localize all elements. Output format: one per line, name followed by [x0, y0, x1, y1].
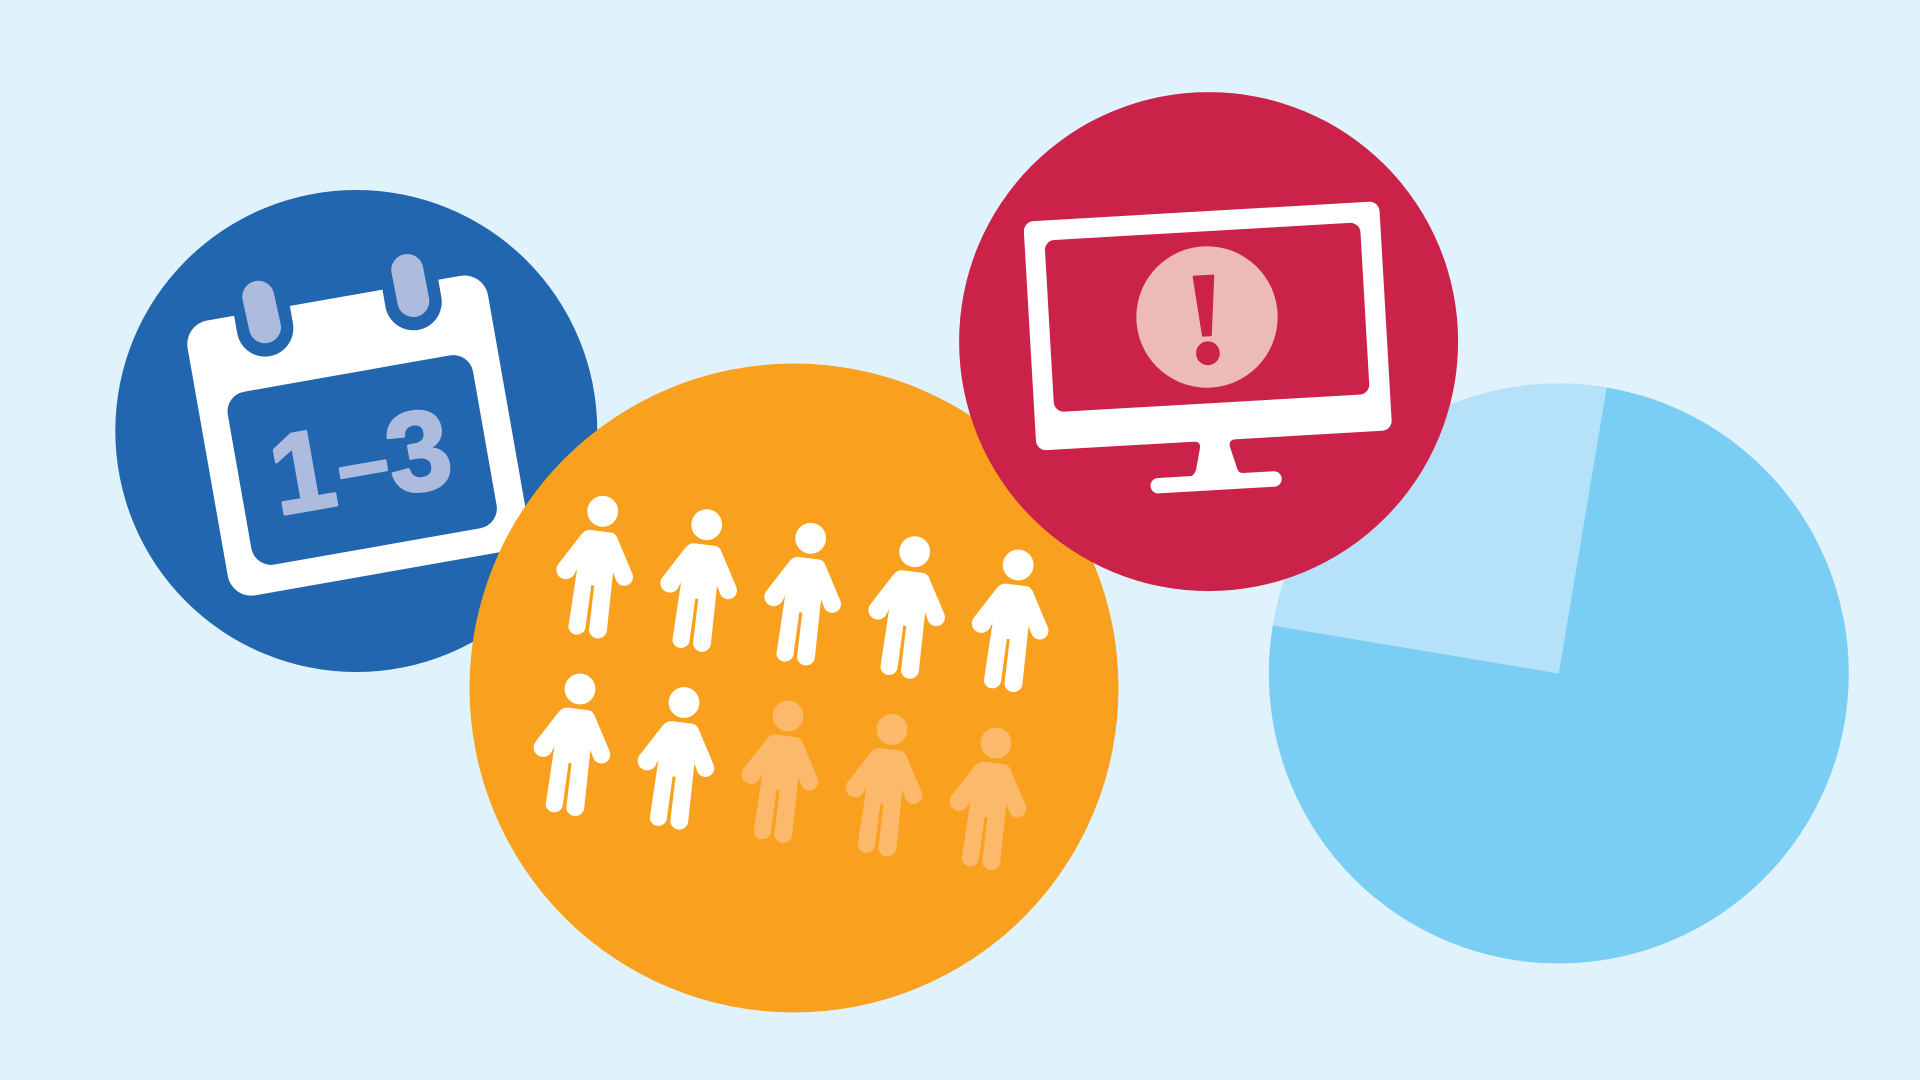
person 5	[973, 550, 1048, 691]
icon: calendar	[183, 270, 532, 599]
blue circle	[115, 190, 597, 672]
person 1	[557, 497, 632, 638]
icon: monitor	[1023, 201, 1392, 486]
panel: calendar circle	[115, 190, 597, 672]
alert disc	[1136, 246, 1278, 388]
calendar date text: 3	[377, 384, 460, 519]
panel: pie chart	[1269, 384, 1849, 964]
right binding ring	[407, 270, 413, 301]
right binding cut-out	[382, 278, 446, 335]
pie: light quarter slice	[1273, 384, 1607, 674]
monitor frame	[1023, 201, 1392, 451]
calendar page	[184, 272, 532, 599]
person 10, faded	[950, 728, 1026, 869]
person 4	[869, 537, 944, 678]
monitor stand	[1189, 430, 1243, 485]
orange circle	[470, 364, 1118, 1012]
person 2	[661, 510, 736, 651]
monitor base	[1158, 479, 1274, 486]
calendar date text: –	[328, 408, 396, 518]
red circle	[959, 92, 1458, 591]
person 9, faded	[846, 715, 922, 856]
person 8, faded	[742, 701, 818, 842]
person 3	[765, 524, 840, 665]
calendar date area	[224, 352, 500, 568]
left binding cut-out	[234, 304, 298, 361]
monitor screen	[1044, 222, 1370, 412]
calendar date text: 1	[260, 404, 344, 539]
person 6	[534, 674, 610, 815]
pie: main slice	[1269, 384, 1849, 964]
alert exclamation mark: !	[1180, 245, 1232, 392]
left binding ring	[258, 297, 265, 327]
person 7	[638, 688, 714, 829]
panel: monitor circle	[959, 92, 1458, 591]
monitor body	[1023, 201, 1392, 451]
panel: people circle	[470, 364, 1118, 1012]
